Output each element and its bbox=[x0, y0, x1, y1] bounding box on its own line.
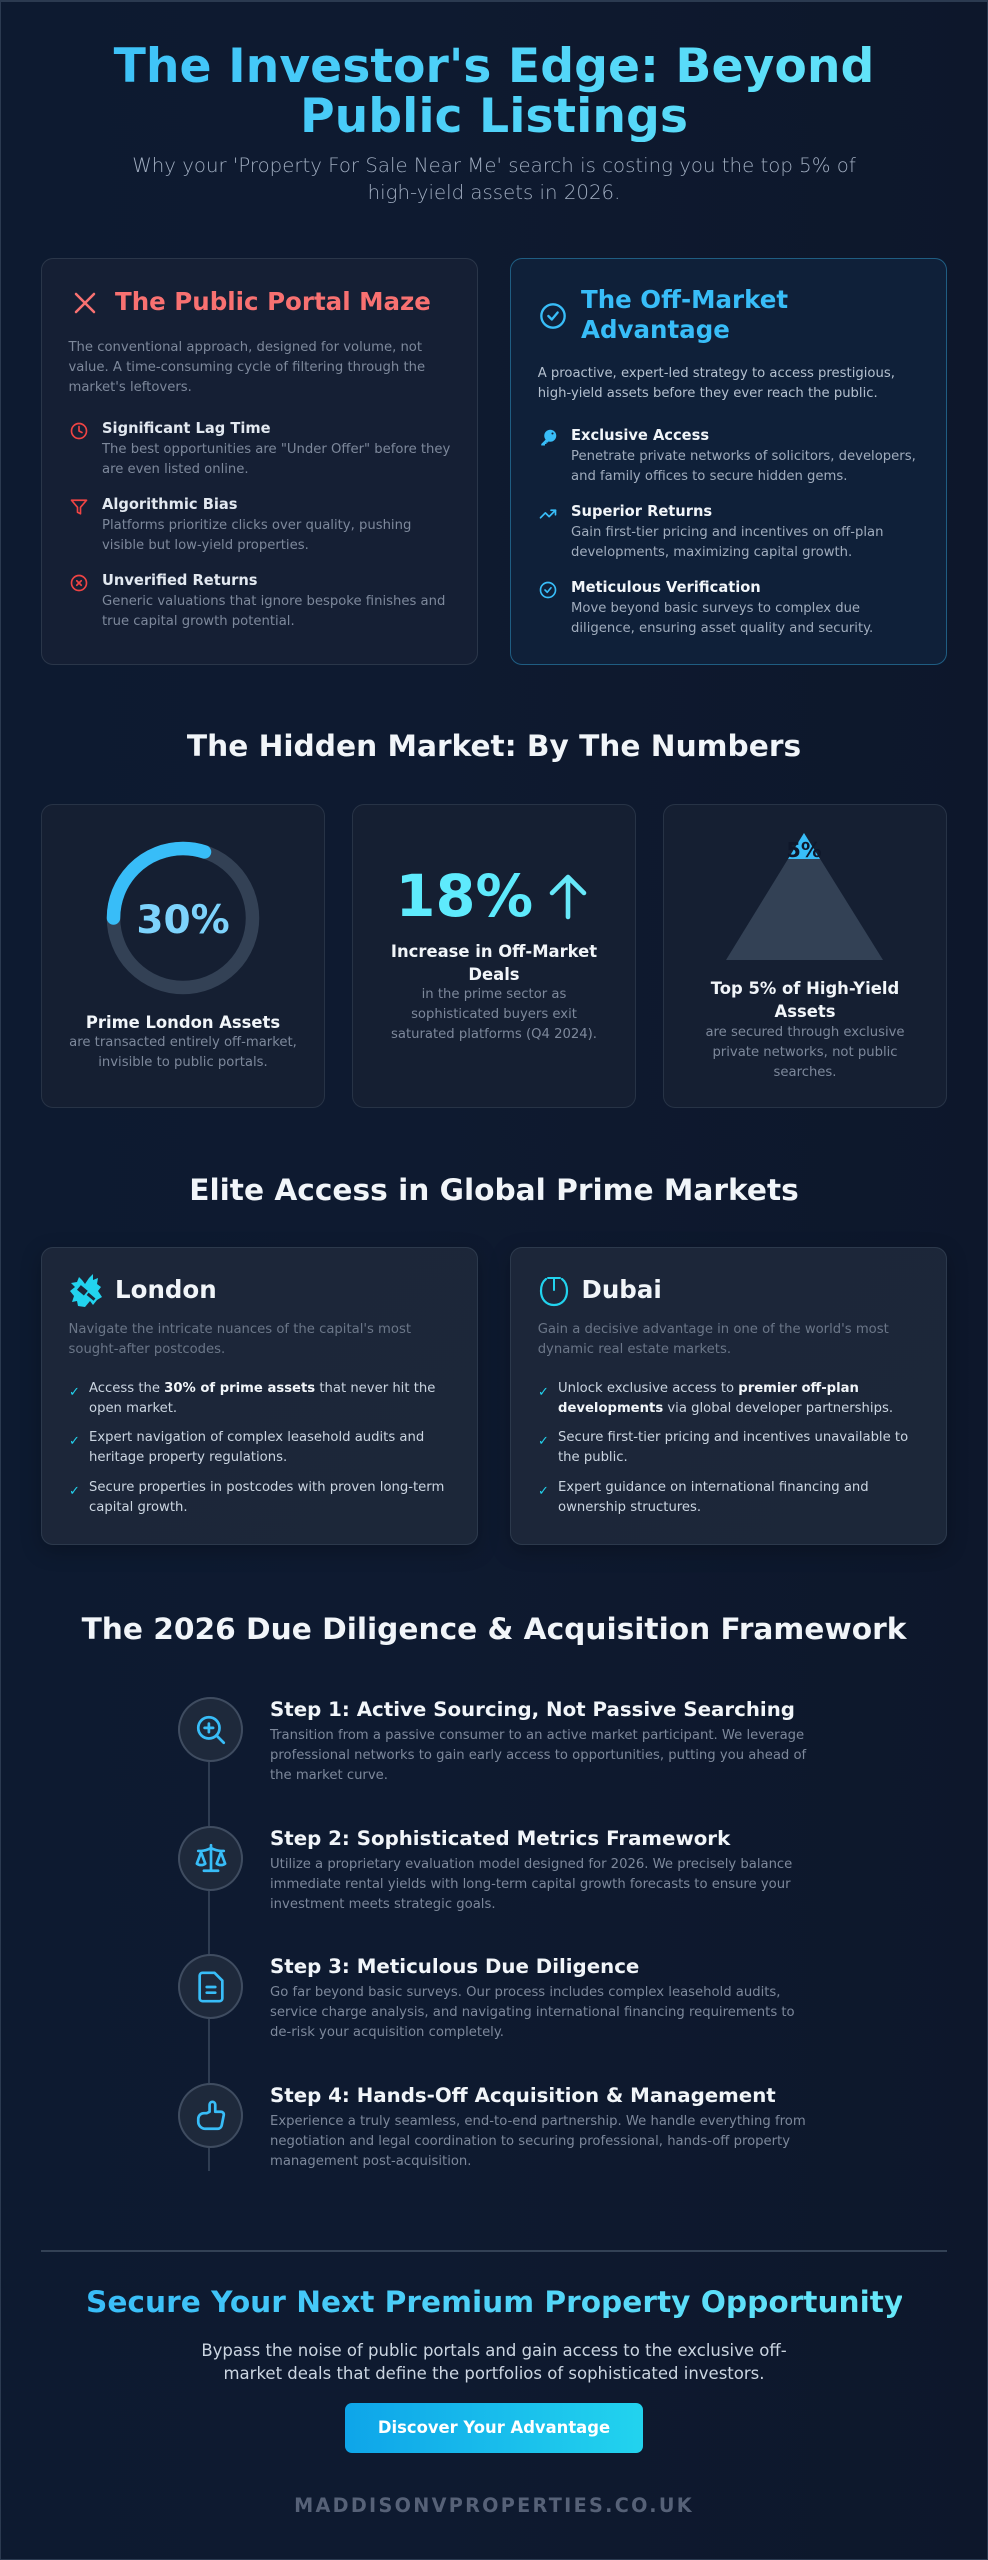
item: significant lag time: are even listed online. bbox=[102, 462, 249, 477]
panel: stat 30 percent bbox=[41, 804, 325, 1108]
item: meticulous verification: Move beyond basic surveys to complex due bbox=[571, 601, 860, 616]
city description: sought-after postcodes. bbox=[68, 1342, 225, 1357]
bullet: first-tier pricing: Secure first-tier pricing and incentives unavailable to bbox=[558, 1430, 908, 1445]
bullet: 30% of prime assets: open market. bbox=[89, 1401, 177, 1416]
item: exclusive access: Penetrate private networks of solicitors, developers, bbox=[571, 449, 916, 464]
call to action text bbox=[201, 2340, 787, 2382]
step 3 title: Step 3: Meticulous Due Diligence bbox=[270, 1955, 639, 1978]
donut chart: 30% bbox=[106, 842, 260, 994]
stat description: searches. bbox=[774, 1064, 836, 1080]
bullet: financing guidance bbox=[538, 1480, 869, 1515]
heading: framework: The 2026 Due Diligence & Acquisition Framework bbox=[82, 1611, 906, 1646]
button: discover your advantage: Discover Your Advantage bbox=[378, 2418, 610, 2437]
intro text: A proactive, expert-led strategy to access prestigious, bbox=[538, 366, 895, 381]
city description: Gain a decisive advantage in one of the world's most bbox=[538, 1322, 889, 1337]
city description bbox=[538, 1322, 889, 1357]
step 4 text: Experience a truly seamless, end-to-end partnership. We handle everything from bbox=[270, 2114, 806, 2129]
icon: scales bbox=[178, 1826, 243, 1890]
step 2 title: Step 2: Sophisticated Metrics Framework bbox=[270, 1827, 730, 1850]
bullet: off-plan developments bbox=[538, 1381, 893, 1416]
bullet: first-tier pricing: the public. bbox=[558, 1450, 628, 1465]
city description: Navigate the intricate nuances of the capital's most bbox=[68, 1322, 411, 1337]
item: exclusive access: Exclusive Access bbox=[571, 427, 709, 444]
step 4 text: negotiation and legal coordination to securing professional, hands-off property bbox=[270, 2134, 790, 2149]
step 2 bbox=[178, 1826, 792, 1912]
subtitle: Why your 'Property For Sale Near Me' search is costing you the top 5% of bbox=[132, 154, 856, 177]
timeline line bbox=[208, 1730, 210, 2171]
step 4 bbox=[178, 2083, 806, 2169]
heading: call to action: Secure Your Next Premium Property Opportunity bbox=[86, 2284, 903, 2319]
item: significant lag time: Significant Lag Time bbox=[102, 420, 271, 437]
call to action text: market deals that define the portfolios of sophisticated investors. bbox=[223, 2364, 764, 2382]
stat label bbox=[391, 942, 597, 984]
bullet: financing guidance: Expert guidance on international financing and bbox=[558, 1480, 869, 1495]
pyramid chart: 5% bbox=[786, 838, 822, 862]
heading: off-market advantage: The Off-Market bbox=[581, 284, 788, 314]
big number: 18%: 18% bbox=[396, 863, 533, 930]
step 1 text: Transition from a passive consumer to an active market participant. We leverage bbox=[270, 1728, 804, 1743]
item: algorithmic bias bbox=[70, 496, 411, 553]
item: unverified returns bbox=[70, 572, 445, 629]
heading: the hidden market: The Hidden Market: By The Numbers bbox=[187, 728, 801, 763]
bullet: leasehold audits: heritage property regulations. bbox=[89, 1450, 287, 1465]
panel: dubai bbox=[510, 1247, 947, 1545]
subtitle bbox=[132, 154, 856, 204]
panel: london: ✓ bbox=[69, 1484, 80, 1499]
heading: off-market advantage bbox=[581, 284, 788, 344]
bullet: postcodes bbox=[69, 1480, 444, 1515]
heading: london: London bbox=[115, 1274, 217, 1304]
intro text: value. A time-consuming cycle of filtering through the bbox=[68, 360, 425, 375]
pyramid chart bbox=[726, 833, 883, 960]
step 3 bbox=[178, 1954, 795, 2040]
bullet: leasehold audits: Expert navigation of complex leasehold audits and bbox=[89, 1430, 424, 1445]
step 3 text bbox=[270, 1985, 795, 2040]
item: meticulous verification: Meticulous Verification bbox=[571, 578, 761, 596]
donut chart: 30%: 30% bbox=[136, 898, 230, 943]
intro text bbox=[68, 340, 425, 395]
item: superior returns bbox=[540, 503, 883, 560]
panel: london: ✓ bbox=[69, 1385, 80, 1400]
bullet: first-tier pricing bbox=[538, 1430, 908, 1465]
panel: the off-market advantage bbox=[510, 258, 947, 665]
stat description: sophisticated buyers exit bbox=[411, 1007, 577, 1022]
panel: dubai: ✓ bbox=[538, 1484, 549, 1499]
stat label: Deals bbox=[468, 965, 520, 984]
step 4 text bbox=[270, 2114, 806, 2169]
stat label: Top 5% of High-Yield bbox=[711, 979, 899, 998]
item: meticulous verification bbox=[540, 578, 873, 636]
item: algorithmic bias: Algorithmic Bias bbox=[102, 496, 238, 513]
item: unverified returns: true capital growth potential. bbox=[102, 614, 295, 629]
step 1 bbox=[178, 1697, 806, 1783]
panel: dubai: ✓ bbox=[538, 1385, 549, 1400]
icon: red cross bbox=[74, 292, 96, 314]
stat description: private networks, not public bbox=[712, 1044, 898, 1060]
step 3 text: Go far beyond basic surveys. Our process includes complex leasehold audits, bbox=[270, 1985, 780, 2000]
icon: arrow up bbox=[550, 874, 586, 920]
timeline: framework steps bbox=[178, 1697, 806, 2171]
step 2 text: Utilize a proprietary evaluation model designed for 2026. We precisely balance bbox=[270, 1857, 792, 1872]
step 1 text: professional networks to gain early access to opportunities, putting you ahead of bbox=[270, 1748, 806, 1763]
step 2 text: immediate rental yields with long-term capital growth forecasts to ensure your bbox=[270, 1877, 791, 1892]
stat label: Assets bbox=[775, 1002, 835, 1021]
stat description bbox=[69, 1035, 297, 1070]
intro text: high-yield assets before they ever reach the public. bbox=[538, 386, 878, 401]
step 2 text bbox=[270, 1857, 792, 1912]
item: algorithmic bias: visible but low-yield properties. bbox=[102, 538, 309, 553]
heading: dubai: Dubai bbox=[582, 1274, 662, 1304]
bullet: postcodes: capital growth. bbox=[89, 1500, 188, 1515]
stat description bbox=[391, 987, 597, 1042]
item: significant lag time bbox=[70, 420, 450, 477]
step 2 text: investment meets strategic goals. bbox=[270, 1897, 496, 1912]
stat description: invisible to public portals. bbox=[98, 1055, 268, 1070]
intro text: market's leftovers. bbox=[68, 380, 192, 395]
stat description: are transacted entirely off-market, bbox=[69, 1035, 297, 1050]
item: exclusive access: and family offices to secure hidden gems. bbox=[571, 469, 847, 484]
stat description bbox=[705, 1024, 905, 1080]
icon: london bbox=[70, 1274, 102, 1307]
panel: london: ✓ bbox=[69, 1434, 80, 1449]
panel: stat top 5 percent bbox=[663, 804, 947, 1108]
stat description: in the prime sector as bbox=[422, 987, 566, 1002]
heading: public portal maze: The Public Portal Maze bbox=[115, 286, 431, 316]
title: Public Listings bbox=[300, 89, 688, 144]
heading: off-market advantage: Advantage bbox=[581, 314, 730, 344]
bullet: off-plan developments: developments via global developer partnerships. bbox=[558, 1401, 893, 1416]
intro text bbox=[538, 366, 895, 401]
panel: stat 18 percent bbox=[352, 804, 636, 1108]
step 1 text bbox=[270, 1728, 806, 1783]
title: The Investor's Edge: Beyond bbox=[114, 39, 874, 94]
bullet: financing guidance: ownership structures. bbox=[558, 1500, 701, 1515]
stat description: saturated platforms (Q4 2024). bbox=[391, 1027, 597, 1042]
item: superior returns: Gain first-tier pricing and incentives on off-plan bbox=[571, 525, 883, 540]
icon: thumbs up bbox=[178, 2083, 243, 2148]
panel: london bbox=[41, 1247, 478, 1545]
heading: elite access: Elite Access in Global Prime Markets bbox=[189, 1172, 799, 1207]
item: unverified returns: Unverified Returns bbox=[102, 572, 258, 589]
item: exclusive access bbox=[541, 427, 916, 484]
item: unverified returns: Generic valuations that ignore bespoke finishes and bbox=[102, 594, 445, 609]
bullet: off-plan developments: Unlock exclusive access to premier off-plan bbox=[558, 1381, 859, 1396]
step 4 title: Step 4: Hands-Off Acquisition & Management bbox=[270, 2084, 776, 2107]
bullet: leasehold audits bbox=[69, 1430, 424, 1465]
step 1 title: Step 1: Active Sourcing, Not Passive Searching bbox=[270, 1698, 795, 1721]
stat label: Prime London Assets bbox=[86, 1013, 280, 1032]
icon: document bbox=[178, 1954, 243, 2019]
bullet: postcodes: Secure properties in postcodes with proven long-term bbox=[89, 1480, 444, 1495]
item: meticulous verification: diligence, ensuring asset quality and security. bbox=[571, 621, 873, 636]
city description bbox=[68, 1322, 411, 1357]
stat label: Increase in Off-Market bbox=[391, 942, 597, 961]
item: superior returns: developments, maximizing capital growth. bbox=[571, 545, 852, 560]
icon: magnifier bbox=[178, 1697, 243, 1762]
title bbox=[0, 42, 988, 142]
step 3 text: service charge analysis, and navigating international financing requirements to bbox=[270, 2005, 795, 2020]
bullet: 30% of prime assets: Access the 30% of prime assets that never hit the bbox=[89, 1381, 435, 1396]
intro text: The conventional approach, designed for volume, not bbox=[68, 340, 422, 355]
item: algorithmic bias: Platforms prioritize clicks over quality, pushing bbox=[102, 518, 411, 533]
button: discover your advantage bbox=[345, 2403, 643, 2453]
bullet: 30% of prime assets bbox=[69, 1381, 435, 1416]
call to action text: Bypass the noise of public portals and gain access to the exclusive off- bbox=[201, 2340, 787, 2360]
icon: dubai bbox=[540, 1277, 568, 1306]
subtitle: high-yield assets in 2026. bbox=[368, 180, 620, 204]
step 3 text: de-risk your acquisition completely. bbox=[270, 2025, 504, 2040]
step 4 text: management post-acquisition. bbox=[270, 2154, 471, 2169]
footer website: MADDISONVPROPERTIES.CO.UK bbox=[294, 2494, 694, 2517]
stat description: are secured through exclusive bbox=[705, 1024, 905, 1040]
icon: check circle bbox=[540, 303, 566, 329]
panel: the public portal maze bbox=[41, 258, 478, 665]
item: superior returns: Superior Returns bbox=[571, 503, 712, 520]
step 1 text: the market curve. bbox=[270, 1768, 388, 1783]
stat label bbox=[710, 979, 899, 1021]
panel: dubai: ✓ bbox=[538, 1434, 549, 1449]
item: significant lag time: The best opportunities are "Under Offer" before they bbox=[102, 442, 450, 457]
city description: dynamic real estate markets. bbox=[538, 1342, 731, 1357]
